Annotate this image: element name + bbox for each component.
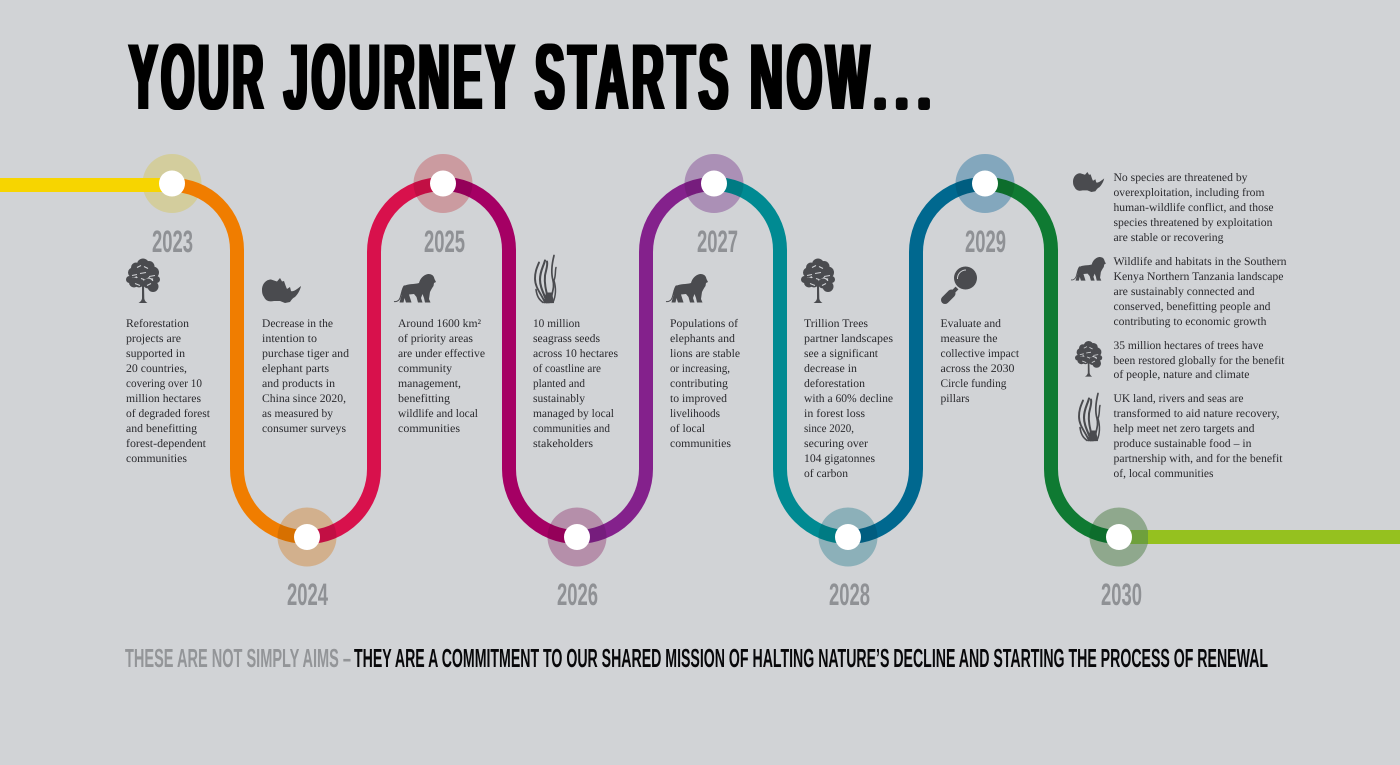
text: seagrass: seagrass seeds [533, 332, 600, 345]
text: elephants and lions: contributing [670, 377, 728, 390]
icon: tree small [1075, 341, 1102, 377]
text: seagrass: stakeholders [533, 437, 594, 450]
icon: tree [801, 258, 835, 303]
darkened overlap inside halos [237, 184, 1119, 537]
title: JOURNEY [284, 24, 518, 129]
panel: 2028 trillion trees [801, 258, 893, 480]
lime overlap inside final halo [1119, 530, 1148, 544]
text: elephants and lions: of local [670, 422, 705, 435]
text: restoration [1114, 339, 1285, 381]
text: priority areas: benefitting [398, 392, 450, 405]
text: trillion trees: Trillion Trees [804, 317, 868, 330]
text: seagrass: across 10 hectares [533, 347, 618, 360]
panel: 2024 consumer demand [262, 278, 349, 435]
text: UK land [1114, 392, 1283, 480]
year labels [152, 224, 1142, 612]
text: seagrass: planted and [533, 377, 585, 390]
text: species: No species are threatened by [1114, 171, 1248, 184]
text: consumer demand: purchase tiger and [262, 347, 349, 360]
text: reforestation: and benefitting [126, 422, 197, 435]
text: wildlife: Wildlife and habitats in the Southern [1114, 255, 1287, 268]
icon: seagrass small [1079, 394, 1100, 441]
text: elephants and lions: Populations of [670, 317, 738, 330]
text: consumer demand: intention to [262, 332, 317, 345]
text: trillion trees: deforestation [804, 377, 865, 390]
text: reforestation: forest-dependent [126, 437, 207, 450]
text: priority areas: of priority areas [398, 332, 473, 345]
path segments [0, 184, 1400, 537]
text: wildlife: contributing to economic growth [1114, 315, 1267, 328]
text: trillion trees: securing over [804, 437, 868, 450]
icon: tree [126, 258, 160, 303]
text: consumer demand: as measured by [262, 407, 333, 420]
text: UK land: partnership with, and for the benefit [1114, 452, 1283, 465]
text: seagrass [533, 317, 618, 450]
text: elephants and lions: elephants and [670, 332, 735, 345]
text: seagrass: managed by local [533, 407, 614, 420]
white node dots [159, 170, 1132, 550]
text: priority areas: communities [398, 422, 460, 435]
panel: 2026 seagrass [533, 256, 618, 450]
text: reforestation: million hectares [126, 392, 201, 405]
icon: seagrass [535, 256, 556, 303]
icon: magnifier [945, 266, 977, 300]
text: priority areas: community [398, 362, 452, 375]
text: UK land: UK land, rivers and seas are [1114, 392, 1244, 405]
year labels: 2030 [1101, 577, 1142, 612]
text: trillion trees: with a 60% decline [804, 392, 893, 405]
text: evaluate [940, 317, 1020, 405]
text: elephants and lions [670, 317, 740, 450]
text: UK land: of, local communities [1114, 467, 1214, 480]
icon: rhino small [1073, 172, 1104, 192]
text: priority areas [398, 317, 485, 435]
text: consumer demand: elephant parts [262, 362, 329, 375]
text: reforestation [126, 317, 211, 465]
text: reforestation: projects are [126, 332, 181, 345]
text: consumer demand: and products in [262, 377, 335, 390]
year labels: 2026 [557, 577, 598, 612]
panel: 2025 priority areas [394, 274, 485, 435]
panel: 2029 evaluate [940, 266, 1020, 405]
text: evaluate: Circle funding [940, 377, 1007, 390]
text: evaluate: across the 2030 [940, 362, 1015, 375]
halo circles [142, 154, 1148, 566]
text: trillion trees: partner landscapes [804, 332, 893, 345]
title: STARTS [535, 24, 732, 129]
text: elephants and lions: or increasing, [670, 362, 730, 375]
text: elephants and lions: communities [670, 437, 731, 450]
text: evaluate: Evaluate and [940, 317, 1001, 330]
title [129, 24, 932, 129]
text: consumer demand [262, 317, 349, 435]
panel: 2030 outcomes [1071, 171, 1287, 480]
text: wildlife: are sustainably connected and [1114, 285, 1255, 298]
text: elephants and lions: to improved [670, 392, 727, 405]
text: reforestation: of degraded forest [126, 407, 211, 420]
text: evaluate: pillars [940, 392, 970, 405]
text: priority areas: management, [398, 377, 461, 390]
text: reforestation: communities [126, 452, 187, 465]
text: seagrass: communities and [533, 422, 610, 435]
year labels: 2023 [152, 224, 193, 259]
text: species: species threatened by exploitation [1114, 216, 1273, 229]
text: restoration: been restored globally for the benefit [1114, 354, 1285, 367]
text: seagrass: 10 million [533, 317, 580, 330]
panel: 2023 reforestation [126, 258, 211, 465]
text: reforestation: supported in [126, 347, 185, 360]
year labels: 2025 [424, 224, 465, 259]
year labels: 2024 [287, 577, 328, 612]
icon: lion [394, 274, 436, 302]
text: trillion trees: since 2020, [804, 422, 854, 435]
text: priority areas: are under effective [398, 347, 485, 360]
timeline path [0, 154, 1400, 566]
title: NOW [750, 24, 873, 129]
text: wildlife [1114, 255, 1287, 328]
text: trillion trees: see a significant [804, 347, 879, 360]
closing statement: THESE ARE NOT SIMPLY AIMS – [125, 643, 351, 673]
text: species: human-wildlife conflict, and those [1114, 201, 1274, 214]
text: priority areas: wildlife and local [398, 407, 478, 420]
icon: lion small [1071, 257, 1106, 281]
text: trillion trees [804, 317, 893, 480]
title: ... [872, 53, 932, 120]
text: seagrass: of coastline are [533, 362, 601, 375]
text: reforestation: 20 countries, [126, 362, 187, 375]
year labels: 2029 [965, 224, 1006, 259]
text: evaluate: collective impact [940, 347, 1020, 360]
text: trillion trees: decrease in [804, 362, 857, 375]
text: consumer demand: Decrease in the [262, 317, 333, 330]
text: priority areas: Around 1600 km² [398, 317, 482, 330]
text: species [1114, 171, 1274, 244]
text: consumer demand: China since 2020, [262, 392, 346, 405]
text: trillion trees: 104 gigatonnes [804, 452, 875, 465]
year labels: 2028 [829, 577, 870, 612]
text: consumer demand: consumer surveys [262, 422, 346, 435]
icon: rhino [262, 278, 301, 303]
text: UK land: produce sustainable food – in [1114, 437, 1252, 450]
text: elephants and lions: livelihoods [670, 407, 720, 420]
text: restoration: 35 million hectares of trees have [1114, 339, 1264, 352]
text: species: overexploitation, including from [1114, 186, 1264, 199]
icon: lion [666, 274, 708, 302]
title: YOUR [129, 24, 267, 129]
panel: 2027 elephants and lions [666, 274, 740, 450]
text: species: are stable or recovering [1114, 231, 1224, 244]
text: trillion trees: of carbon [804, 467, 848, 480]
text: UK land: help meet net zero targets and [1114, 422, 1255, 435]
text: seagrass: sustainably [533, 392, 585, 405]
text: wildlife: Kenya Northern Tanzania landscape [1114, 270, 1284, 283]
text: reforestation: Reforestation [126, 317, 189, 330]
text: restoration: of people, nature and climate [1114, 368, 1250, 381]
text: elephants and lions: lions are stable [670, 347, 740, 360]
text: reforestation: covering over 10 [126, 377, 202, 390]
text: UK land: transformed to aid nature recovery, [1114, 407, 1280, 420]
text: evaluate: measure the [940, 332, 998, 345]
text: trillion trees: in forest loss [804, 407, 865, 420]
text: wildlife: conserved, benefitting people and [1114, 300, 1271, 313]
year labels: 2027 [697, 224, 738, 259]
